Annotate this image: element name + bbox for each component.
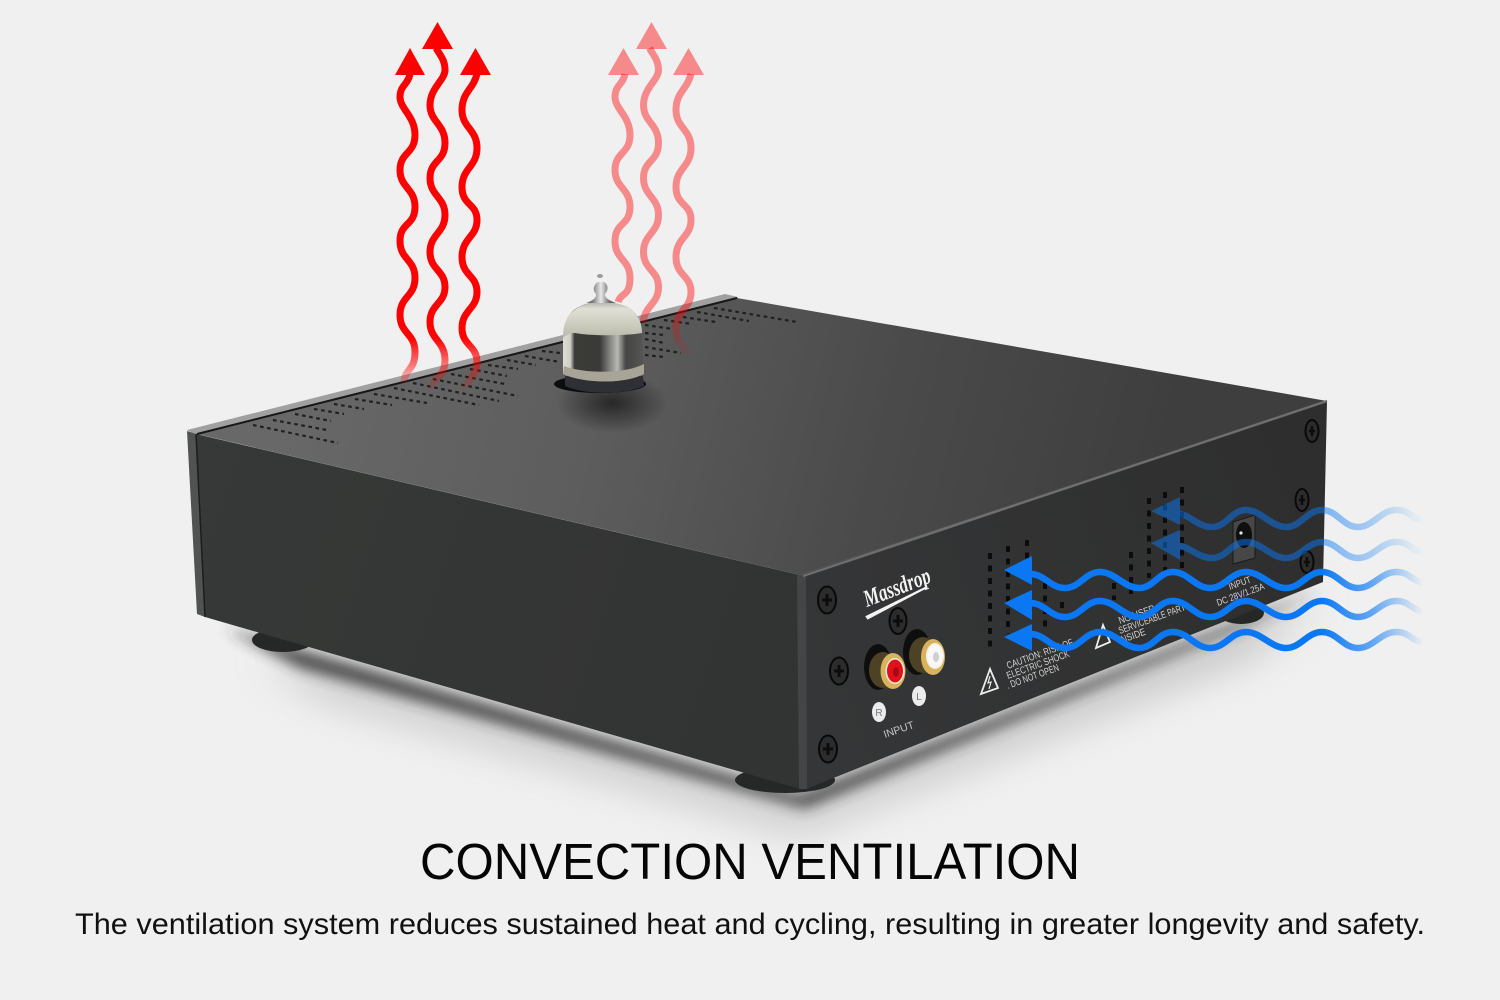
pink heat arrows behind tube — [608, 22, 704, 358]
brand wordmark: Massdrop — [859, 563, 935, 613]
tube tip — [586, 274, 616, 303]
tube glass body — [563, 302, 644, 382]
tube shadow — [556, 373, 668, 433]
screws — [818, 420, 1318, 762]
front corner chamfer — [797, 574, 807, 789]
description: The ventilation system reduces sustained heat and cycling, resulting in greater longevity and safety. — [75, 908, 1425, 941]
screw — [819, 736, 837, 762]
faded wave 1 — [1151, 497, 1425, 527]
vacuum tube — [554, 274, 668, 433]
blue intake arrows faded — [1151, 497, 1425, 560]
floor shadow — [225, 590, 1322, 825]
faded wave 2 — [1151, 530, 1425, 560]
title: CONVECTION VENTILATION — [420, 833, 1080, 890]
box left face — [196, 434, 800, 789]
red heat arrows — [395, 22, 491, 397]
logo swoosh — [863, 587, 929, 620]
top lid back strip — [187, 294, 738, 436]
caution icon — [981, 669, 998, 694]
red arrowheads — [395, 22, 491, 75]
top ventilation holes — [253, 308, 797, 443]
input label: INPUT — [882, 719, 916, 741]
screw — [830, 658, 848, 684]
R badge: R — [875, 708, 883, 719]
brand logo — [855, 563, 937, 620]
DC jack — [1233, 515, 1255, 564]
DC input text: INPUT — [1227, 575, 1253, 593]
left channel socket — [903, 629, 945, 675]
caution text: . DO NOT OPEN — [1005, 663, 1061, 692]
box top face — [197, 298, 1327, 575]
right channel socket — [864, 644, 906, 690]
red wave lines — [400, 48, 477, 397]
screw — [890, 608, 906, 634]
blue intake arrow 1 — [1004, 556, 1425, 588]
screw — [1296, 489, 1308, 511]
tube base — [565, 376, 644, 393]
blue intake arrow 2 — [1004, 590, 1425, 620]
tube dome — [563, 302, 642, 338]
screw — [818, 586, 836, 614]
pink arrowheads — [608, 22, 704, 75]
caution text — [1005, 638, 1075, 692]
top face edges — [196, 298, 1327, 617]
box left edge lip — [187, 431, 205, 617]
second warning icon — [1096, 625, 1110, 648]
screw — [1306, 420, 1318, 442]
feet — [252, 602, 1264, 793]
service text: NO USER — [1117, 603, 1157, 627]
tube lower glass — [563, 364, 644, 382]
service text: INSIDE — [1117, 627, 1148, 647]
caution text: CAUTION: RISK OF — [1005, 638, 1075, 672]
tube socket hole — [554, 375, 646, 393]
blue intake arrow 3 — [1004, 624, 1425, 651]
box front panel — [800, 401, 1327, 789]
service text — [1117, 601, 1192, 647]
DC input text: DC 28V/1.25A — [1215, 581, 1267, 609]
L badge: L — [916, 692, 922, 703]
front panel vent holes — [990, 487, 1182, 650]
service text: SERVICEABLE PARTS — [1117, 601, 1192, 637]
caution text: ELECTRIC SHOCK — [1005, 649, 1071, 682]
screw — [1300, 551, 1314, 573]
RCA connectors — [864, 629, 945, 741]
pink wave lines — [615, 48, 691, 358]
